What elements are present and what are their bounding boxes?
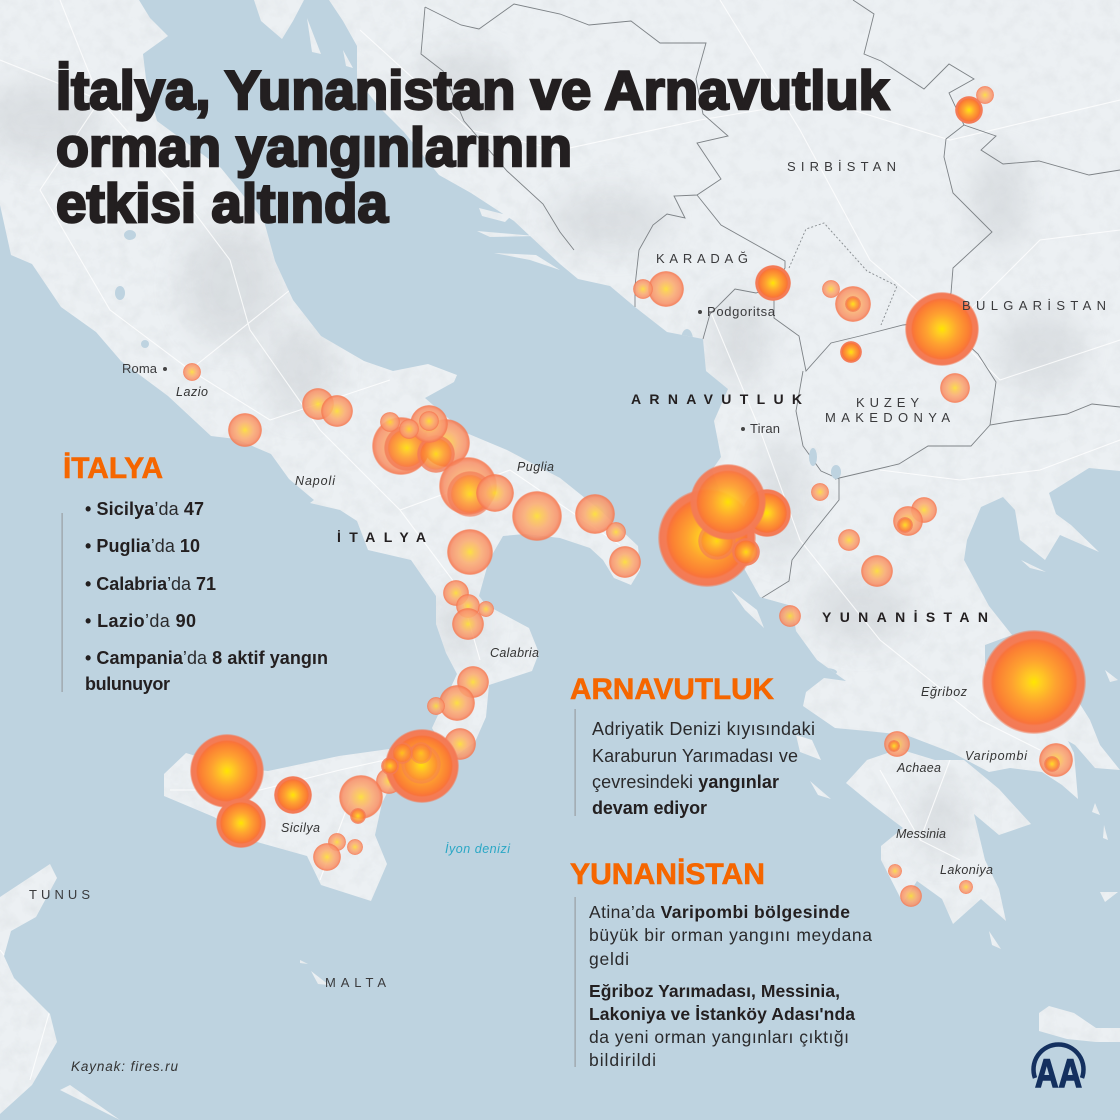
panel: Italy [62,452,328,694]
map labels: cities: Tiran [750,421,780,436]
map labels: countries: KUZEY [856,395,919,410]
map labels: countries: MAKEDONYA [825,410,950,425]
text: Albania body: Karaburun Yarımadası ve [592,746,798,766]
map labels: countries: YUNANİSTAN [822,609,988,625]
map labels: cities [122,304,780,436]
list: Italian regions: • Calabria’da 71 [85,574,216,594]
map labels: countries: KARADAĞ [656,251,748,266]
map labels: regions: Eğriboz [921,685,968,699]
text: Albania body: çevresindeki yangınlar [592,772,779,792]
text: Greece body [574,897,872,1070]
panel: Greece [570,858,872,1070]
map labels: regions: Lazio [176,385,208,399]
text: Greece body: geldi [589,949,629,969]
map labels: regions: Lakoniya [940,863,993,877]
lakes [115,230,841,676]
map labels: regions: Sicilya [281,821,320,835]
map labels: regions: Varipombi [965,749,1028,763]
map labels: regions: Puglia [517,460,554,474]
map labels: cities: Podgoritsa [707,304,776,319]
fires: Italy mainland [183,363,641,760]
list: Italian regions: • Sicilya’da 47 [85,499,204,519]
title: İtalya, Yunanistan ve Arnavutluk [56,59,889,121]
text: Albania body: devam ediyor [592,798,707,818]
mountain shading [0,50,1085,860]
title [56,59,889,234]
map labels: regions: Messinia [896,827,946,841]
map labels: regions: Napoli [295,474,336,488]
fires: Balkans and Greece [633,86,1086,907]
text: Greece body: büyük bir orman yangını meydana [589,925,872,945]
panel: Albania [570,673,815,818]
map labels: countries [29,159,1106,990]
list: Italian regions: • Campania’da 8 aktif yangın [85,648,328,668]
title: etkisi altında [56,172,388,234]
map labels: regions: İyon denizi [445,842,511,856]
list: Italian regions: bulunuyor [85,674,170,694]
source: Kaynak: fires.ru [71,1059,178,1074]
map labels: regions: Achaea [896,761,941,775]
map labels: regions: Calabria [490,646,539,660]
fires: Sicily [190,729,459,871]
text: Greece body: Lakoniya ve İstanköy Adası'nda [589,1004,855,1024]
map labels: countries: ARNAVUTLUK [631,391,802,407]
map labels: cities: Roma [122,361,158,376]
text: Albania body: Adriyatik Denizi kıyısındaki [592,719,815,739]
title: orman yangınlarının [56,116,572,178]
list: Italian regions: • Lazio’da 90 [85,611,196,631]
map labels: countries: MALTA [325,975,386,990]
fires: Albanian coast cluster [658,464,791,587]
text: Albania body [574,709,815,818]
list: Italian regions: • Puglia’da 10 [85,536,200,556]
map labels: countries: TUNUS [29,887,90,902]
map labels: regions [176,385,1028,877]
list: Italian regions [62,499,328,694]
heading: Italy: İTALYA [63,452,163,485]
logo: AA: AA [1035,1052,1082,1096]
map labels: countries: SIRBİSTAN [787,159,896,174]
text: Greece body: bildirildi [589,1050,656,1070]
map labels: countries: BULGARİSTAN [962,298,1106,313]
text: Greece body: da yeni orman yangınları çıktığı [589,1027,849,1047]
heading: Greece: YUNANİSTAN [570,858,765,891]
text: Greece body: Atina’da Varipombi bölgesinde [589,902,850,922]
country borders [421,0,1120,599]
land texture [32,46,834,910]
text: Greece body: Eğriboz Yarımadası, Messinia, [589,981,840,1001]
heading: Albania: ARNAVUTLUK [570,673,774,706]
map labels: countries: İTALYA [337,529,426,545]
